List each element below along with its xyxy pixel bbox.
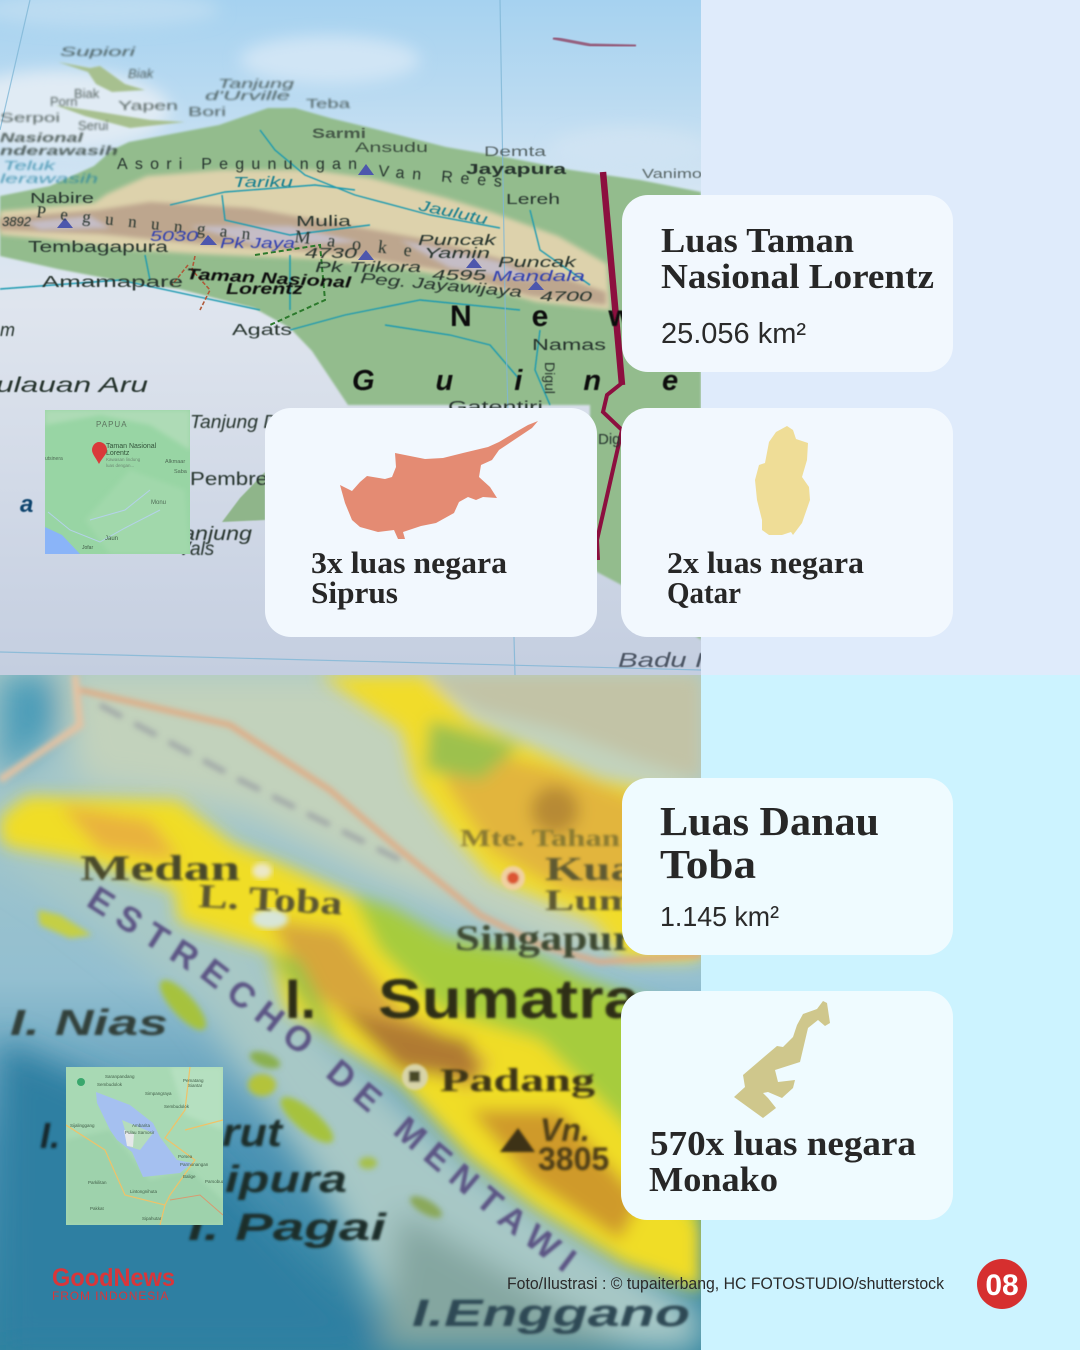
map labels: Papua: Serui xyxy=(78,118,108,133)
icon: place pin xyxy=(77,1078,85,1086)
map labels: Papua: 5030 xyxy=(150,228,199,245)
land: Malay peninsula xyxy=(320,675,701,959)
map labels: Papua: nderawasih xyxy=(0,143,118,158)
photo: map of Papua and New Guinea xyxy=(0,0,739,675)
heading: Luas Taman Nasional Lorentz: Luas Taman xyxy=(661,221,854,260)
map labels: Papua: Lereh xyxy=(506,191,560,208)
text: 2x luas negara Qatar: 2x luas negara xyxy=(667,545,865,580)
map labels: Papua: a xyxy=(20,491,33,518)
inset map: Taman Nasional Lorentz: Taman Nasional xyxy=(106,443,157,450)
map labels: Papua: Tariku xyxy=(233,174,294,191)
map labels: Papua: Teba xyxy=(306,96,351,111)
map labels: Papua: Lorentz xyxy=(226,281,303,298)
inset map: Danau Toba: Sijalinggang xyxy=(70,1123,95,1128)
map labels: Papua: Pk Jaya xyxy=(220,235,295,252)
value: 1.145 km2: 1.145 km² xyxy=(660,901,779,932)
map labels: Papua: Taman Nasional xyxy=(186,266,352,292)
icon: Monaco silhouette xyxy=(734,1001,830,1118)
card: Siprus comparison xyxy=(265,408,597,637)
text: 3x luas negara Siprus: 3x luas negara xyxy=(311,545,508,580)
mountain peak markers xyxy=(57,164,544,290)
map labels: Papua: Vals xyxy=(178,539,215,560)
land: Sumatra xyxy=(0,796,701,1291)
map labels: Papua: Porn xyxy=(50,94,77,109)
map labels: Papua: Bori xyxy=(188,104,226,119)
map labels: Papua: Agats xyxy=(232,322,292,339)
map labels: Papua: Namas xyxy=(532,337,606,354)
inset map: Taman Nasional Lorentz: PAPUA xyxy=(96,420,128,429)
map labels: Papua: Vanimo xyxy=(642,166,702,181)
inset map: Danau Toba: Parmonangan xyxy=(180,1162,209,1167)
land: New Guinea xyxy=(0,108,701,640)
photo credit: Foto/Ilustrasi : © tupaiterbang, HC FOTOSTUDIO/shutterstock xyxy=(507,1274,944,1293)
text: 570x luas negara Monako: 570x luas negara xyxy=(650,1124,916,1163)
map labels: Papua: Puncak xyxy=(498,255,577,271)
map labels: Papua: Digoel xyxy=(598,431,641,448)
map labels: Papua: Maoke xyxy=(294,226,413,260)
photo: blurred map of Sumatra xyxy=(0,675,701,1350)
inset map: Taman Nasional Lorentz: luas dengan... xyxy=(106,463,134,468)
logo: GoodNews from Indonesia xyxy=(52,1264,175,1303)
map labels: Papua: Tembagapura xyxy=(28,239,169,256)
map labels: Papua: Puncak xyxy=(418,233,497,249)
map labels: Sumatra: I. xyxy=(40,1115,60,1156)
heading: Luas Danau Toba: Toba xyxy=(660,841,756,887)
map labels: Papua: Tanjung xyxy=(170,524,253,545)
map labels: Papua: Digul xyxy=(542,362,558,394)
inset map: Taman Nasional Lorentz: Kawasan lindung xyxy=(106,457,141,462)
map labels: Papua: Serpoi xyxy=(0,110,60,125)
map labels: Sumatra: 3805 xyxy=(538,1141,609,1177)
map labels: Sumatra: L. Toba xyxy=(198,878,343,923)
map labels: Papua: Gatentiri xyxy=(448,399,543,416)
icon: map pin xyxy=(92,442,107,464)
card: Luas Danau Toba xyxy=(622,778,953,955)
map labels: Papua xyxy=(0,44,739,672)
inset map: Danau Toba: Balige xyxy=(183,1174,196,1179)
logo: GoodNews from Indonesia: FROM INDONESIA xyxy=(52,1289,169,1303)
map labels: Papua: Pk Trikora xyxy=(315,259,421,276)
islands: Biak and Yapen xyxy=(55,62,185,128)
inset map: Taman Nasional Lorentz: Jofar xyxy=(82,545,93,551)
map labels: Papua: New xyxy=(450,300,692,333)
map labels: Papua: Tanjung xyxy=(218,76,295,91)
islands: Mentawai and Nias xyxy=(38,910,445,1222)
icon: Qatar silhouette xyxy=(755,426,810,535)
map labels: Papua: Demta xyxy=(484,143,546,159)
logo: GoodNews from Indonesia: GoodNews xyxy=(52,1264,175,1292)
map labels: Papua: Sarmi xyxy=(312,125,366,141)
value: 25.056 km2: 25.056 km² xyxy=(661,318,806,350)
text: 570x luas negara Monako xyxy=(649,1124,916,1199)
land: south peninsula xyxy=(222,472,265,522)
inset map: Danau Toba xyxy=(66,1067,227,1225)
map labels: Sumatra: ESTRECHO DE MENTAWI xyxy=(86,885,578,1273)
inset map: Taman Nasional Lorentz xyxy=(45,410,190,554)
map labels: Papua: Tanjung De xyxy=(190,412,288,432)
map labels: Sumatra: Kua xyxy=(545,851,635,888)
text: 2x luas negara Qatar xyxy=(667,545,865,610)
map labels: Sumatra: Sumatra xyxy=(378,967,641,1030)
inset map: Danau Toba: Parkilitan xyxy=(88,1180,107,1185)
map labels: Papua: Pembre xyxy=(190,469,268,489)
inset map: Danau Toba: Porsea xyxy=(178,1154,193,1159)
map labels: Papua: Peg. Jayawijaya xyxy=(360,270,523,301)
inset map: Danau Toba: Pulau Samosir xyxy=(125,1130,155,1135)
inset map: Danau Toba: Parsobuan xyxy=(205,1179,227,1184)
map labels: Sumatra: Mte. Tahan xyxy=(460,826,620,852)
inset map: Taman Nasional Lorentz: Lorentz xyxy=(106,450,130,457)
heading: Luas Danau Toba: Luas Danau xyxy=(660,798,879,844)
map labels: Papua: Nabire xyxy=(30,190,94,207)
inset map: Taman Nasional Lorentz: utsinera xyxy=(45,456,63,462)
map labels: Papua: Guine xyxy=(352,365,739,397)
map labels: Sumatra: I. xyxy=(285,967,316,1030)
map labels: Sumatra xyxy=(10,828,690,1336)
map labels: Papua: 3892 xyxy=(2,214,32,229)
map labels: Papua: Mulia xyxy=(296,213,352,230)
map labels: Papua: Amamapare xyxy=(42,274,183,291)
heading: Luas Danau Toba xyxy=(660,798,879,887)
lake: Toba xyxy=(252,909,288,929)
map labels: Papua: Asori Pegunungan xyxy=(117,156,357,173)
inset map: Danau Toba: Simpangraya xyxy=(145,1091,172,1096)
map labels: Sumatra: I. Nias xyxy=(10,1002,168,1043)
card: Monako comparison xyxy=(621,991,953,1220)
inset map: Danau Toba: Sembudolok xyxy=(164,1104,190,1109)
map labels: Papua: Biak xyxy=(128,66,155,81)
inset map: Danau Toba: Ambarita xyxy=(132,1123,151,1128)
icon: Cyprus silhouette xyxy=(340,421,538,539)
inset map: Taman Nasional Lorentz: Alkmaar xyxy=(165,459,185,465)
inset map: Taman Nasional Lorentz: Saba xyxy=(174,469,188,475)
text: 3x luas negara Siprus: Siprus xyxy=(311,575,398,610)
background panel: top right xyxy=(701,0,1080,675)
map labels: Sumatra: Padang xyxy=(440,1063,596,1099)
map labels: Papua: Yamin xyxy=(424,246,490,262)
map labels: Sumatra: Lum xyxy=(545,884,635,917)
map labels: Papua: Van Rees xyxy=(378,163,503,191)
map labels: Sumatra: Singapura xyxy=(455,918,655,958)
map labels: Papua: 4700 xyxy=(540,289,593,304)
inset map: Danau Toba: Pakkat xyxy=(90,1206,105,1211)
map labels: Sumatra: rut xyxy=(222,1111,284,1155)
map labels: Papua: Mandala xyxy=(492,268,585,285)
sea road line xyxy=(0,675,701,962)
map labels: Papua: Biak xyxy=(74,86,100,101)
map labels: Papua: Yapen xyxy=(118,98,178,113)
map labels: Papua: Jayapura xyxy=(466,161,567,178)
text: 2x luas negara Qatar: Qatar xyxy=(667,575,741,610)
inset map: Danau Toba: Lintongnihuta xyxy=(130,1189,158,1194)
inset map: Taman Nasional Lorentz: Jaun xyxy=(105,536,118,542)
map labels: Papua: 4730 xyxy=(305,245,358,262)
map labels: Papua: d'Urville xyxy=(205,88,290,103)
map labels: Papua: Nasional xyxy=(0,130,84,145)
mountains: tan ridge xyxy=(0,170,610,310)
text: 3x luas negara Siprus xyxy=(311,545,508,610)
map labels: Sumatra: Vn. xyxy=(540,1112,590,1148)
map labels: Papua: Jaulutu xyxy=(416,197,490,229)
inset map: Danau Toba: Sipahutar xyxy=(142,1216,162,1221)
background panel: bottom right xyxy=(701,675,1080,1350)
map labels: Sumatra: Medan xyxy=(80,848,240,888)
card: Qatar comparison xyxy=(621,408,953,637)
map labels: Sumatra: ipura xyxy=(225,1159,347,1201)
inset map: Taman Nasional Lorentz: Monu xyxy=(151,500,166,506)
map labels: Papua: lerawasih xyxy=(0,171,98,186)
heading: Luas Taman Nasional Lorentz: Nasional Lorentz xyxy=(661,257,934,296)
rivers xyxy=(0,130,590,405)
map labels: Sumatra: I.Enggano xyxy=(412,1293,690,1335)
map labels: Papua: Badu I xyxy=(618,650,704,672)
inset map: Danau Toba: Pematang xyxy=(183,1078,204,1083)
heading: Luas Taman Nasional Lorentz xyxy=(661,221,934,296)
map labels: Papua: Ansudu xyxy=(355,139,428,155)
border line: Papua New Guinea xyxy=(172,38,636,560)
inset map: Danau Toba: Sembudolok xyxy=(97,1082,123,1087)
map labels: Papua: 4595 xyxy=(432,267,487,284)
map labels: Papua: Supiori xyxy=(60,44,137,59)
map labels: Papua: Teluk xyxy=(3,158,58,173)
grid lines xyxy=(0,0,701,675)
map labels: Papua: Pegunungan xyxy=(36,202,252,244)
map labels: Papua: m xyxy=(0,320,15,340)
inset map: Danau Toba: Siantar xyxy=(188,1083,203,1088)
inset map: Danau Toba: Saranpandang xyxy=(105,1074,135,1079)
page number badge: 08 xyxy=(985,1269,1019,1302)
page number badge xyxy=(977,1259,1027,1309)
text: 570x luas negara Monako: Monako xyxy=(649,1160,778,1199)
card: Luas Taman Nasional Lorentz xyxy=(622,195,953,372)
map labels: Sumatra: I. Pagai xyxy=(188,1207,388,1249)
